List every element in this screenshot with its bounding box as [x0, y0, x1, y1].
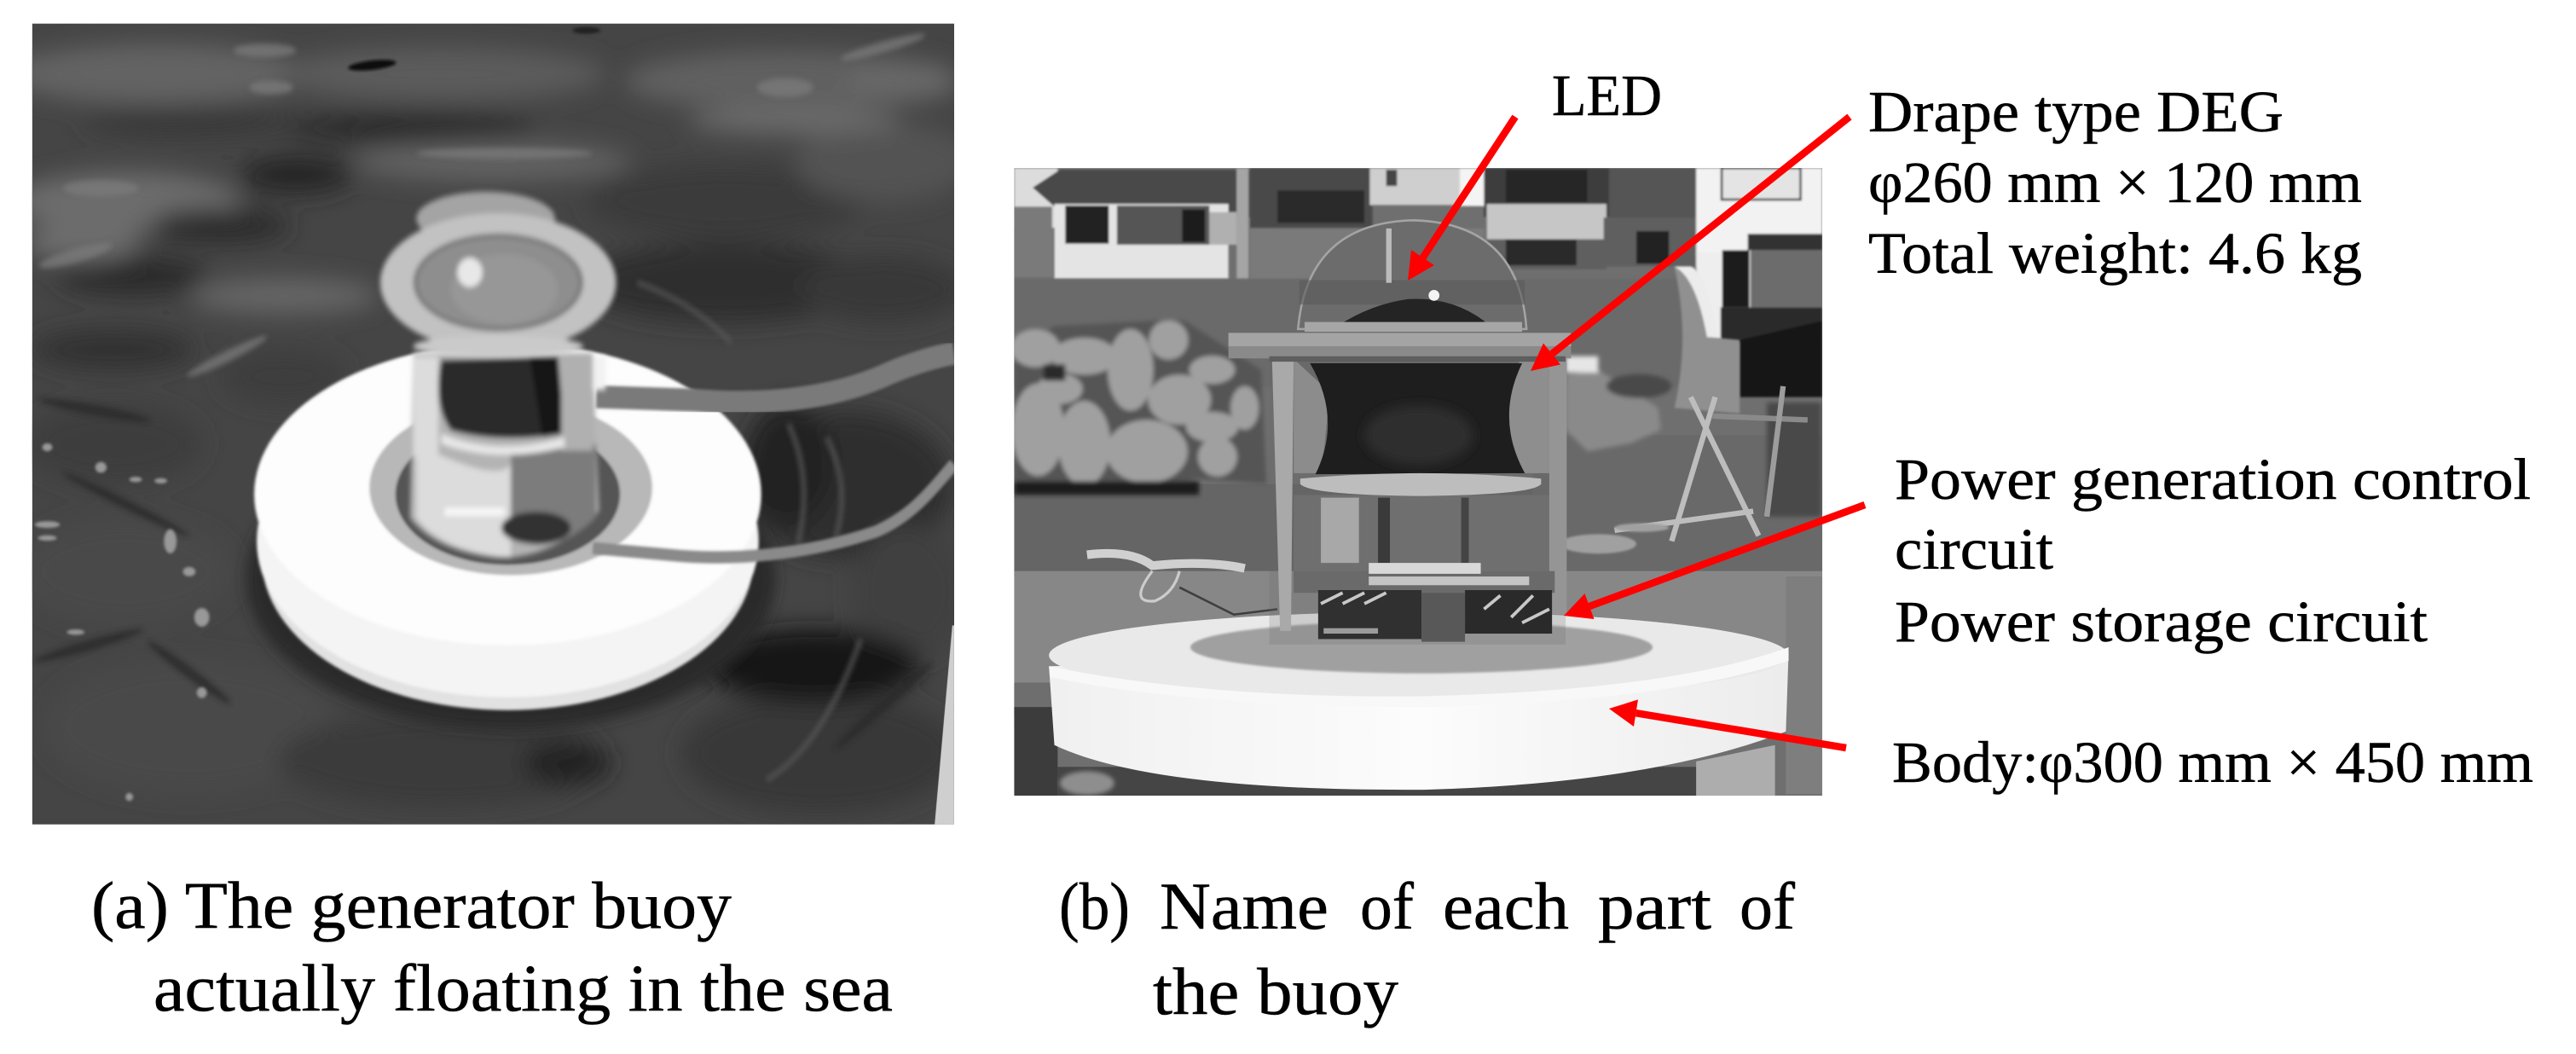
middle ring: [1300, 473, 1541, 496]
label: LED: LED: [1552, 63, 1662, 128]
white buoy body: [246, 343, 776, 730]
lower flange ring: [369, 400, 652, 575]
top plate: [1229, 333, 1571, 362]
caption (b): the buoy: [1153, 954, 1398, 1028]
label: drape type DEG: Drape type DEG: [1868, 79, 2284, 144]
sea wall: [1014, 267, 1740, 414]
label: circuits: circuit: [1895, 517, 2053, 582]
caption (b): [1059, 869, 1795, 1028]
arrow: body: [1609, 699, 1846, 748]
label: drape type DEG: Total weight: 4.6 kg: [1868, 221, 2362, 286]
label: drape type DEG: [1868, 79, 2362, 286]
caption (a): actually floating in the sea: [153, 951, 893, 1025]
white buoy body: [1049, 612, 1789, 790]
caption (b): part: [1598, 869, 1711, 943]
transparent cylinder and DEG: [410, 353, 605, 559]
right side blocks and tripod: [1560, 356, 1821, 553]
caption (b): of: [1740, 869, 1795, 943]
lower hose: [593, 464, 954, 557]
circuit boards: [1294, 563, 1554, 642]
photo (b): named parts of the buoy: [1011, 168, 1822, 796]
label: body: Body:φ300 mm × 450 mm: [1892, 730, 2533, 795]
caption (b): (b): [1059, 869, 1130, 943]
label: circuits: [1895, 447, 2531, 654]
pale rail at the corner: [935, 625, 954, 825]
upper flange and dome: [380, 192, 617, 357]
see-through cylinder and posts: [1269, 356, 1566, 645]
concrete blocks on the left: [1011, 321, 1266, 495]
base plate: [1190, 621, 1653, 674]
label: drape type DEG: φ260 mm × 120 mm: [1868, 150, 2362, 215]
ground: [1014, 484, 1269, 576]
arrow: LED: [1408, 117, 1515, 281]
upper hose: [596, 353, 954, 402]
stone embankment: [1014, 553, 1822, 794]
caption (b): Name: [1160, 869, 1329, 943]
sea waves: [6, 27, 971, 814]
caption (b): of: [1360, 869, 1414, 943]
dielectric elastomer generator: [1310, 363, 1525, 474]
clear LED dome: [1298, 220, 1526, 332]
label: circuits: Power storage circuit: [1895, 589, 2428, 654]
caption (b): each: [1443, 869, 1569, 943]
houses in the background: [1014, 168, 1822, 397]
label: circuits: Power generation control: [1895, 447, 2531, 512]
caption (a): (a) The generator buoy: [91, 868, 732, 942]
arrow: drape type DEG: [1531, 117, 1850, 371]
photo (a): generator buoy floating in the sea: [6, 24, 971, 825]
arrow: circuits: [1564, 505, 1865, 619]
caption (a): [91, 868, 893, 1025]
